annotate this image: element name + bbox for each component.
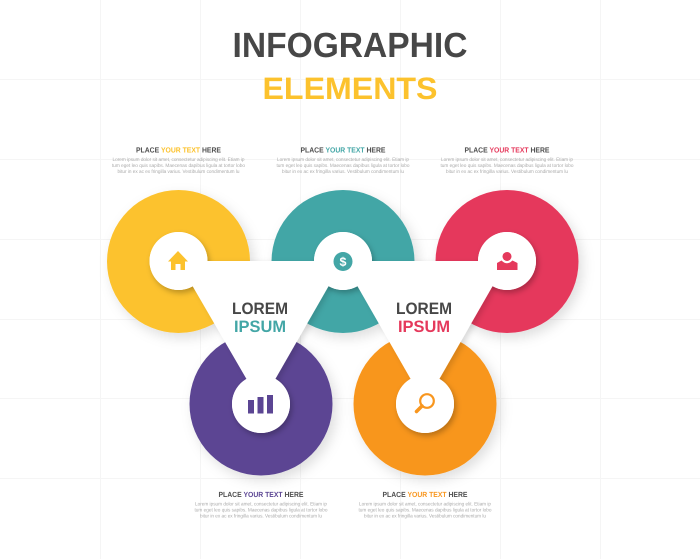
text block: teal: tum eget leo quis sapibs. Maecenas dapibus ligula at tortor lobo [276,163,410,169]
text block: orange: PLACE YOUR TEXT HERE [382,490,468,499]
text block: red: PLACE YOUR TEXT HERE [464,146,550,154]
text block: yellow: PLACE YOUR TEXT HERE [136,146,221,154]
icon: bars [248,395,273,414]
title: ELEMENTS [262,71,438,106]
icon: magnifier [416,394,434,412]
text block: purple: tum eget leo quis sapibs. Maecenas dapibus ligula at tortor lobo [194,508,328,514]
text block: yellow [112,146,245,175]
text block: orange: bitur in ex ac ex fringilla varius. Vestibulum condimentum lu [364,514,486,520]
text block: teal [276,146,410,175]
label: lorem ipsum red [396,300,452,336]
text block: red: Lorem ipsum dolor sit amet, consectetur adipiscing elit. Etiam ip [441,157,573,163]
label: lorem ipsum teal: LOREM [232,300,288,318]
white triangles [178,261,507,404]
label: lorem ipsum red: LOREM [396,300,452,318]
text block: orange: tum eget leo quis sapibs. Maecenas dapibus ligula at tortor lobo [358,508,492,514]
text block: yellow: bitur in ex ac ex fringilla varius. Vestibulum condimentum lu [118,169,240,175]
disc: red [436,190,578,333]
text block: purple [194,490,328,520]
inner circle caps [150,232,536,433]
label: lorem ipsum teal: IPSUM [234,318,286,336]
label: lorem ipsum red: IPSUM [398,318,450,336]
text block: yellow: tum eget leo quis sapibs. Maecenas dapibus ligula at tortor lobo [112,163,245,169]
text block: red [440,146,574,175]
label: lorem ipsum teal [232,300,288,336]
text block: orange: Lorem ipsum dolor sit amet, consectetur adipiscing elit. Etiam ip [359,502,491,508]
disc: yellow [107,190,250,333]
icon: dollar [334,252,352,271]
disc: purple [190,332,332,476]
text block: purple: Lorem ipsum dolor sit amet, consectetur adipiscing elit. Etiam ip [195,502,327,508]
text block: purple: PLACE YOUR TEXT HERE [218,490,304,499]
text block: purple: bitur in ex ac ex fringilla varius. Vestibulum condimentum lu [200,514,322,520]
text block: teal: Lorem ipsum dolor sit amet, consectetur adipiscing elit. Etiam ip [277,157,409,163]
text block: teal: PLACE YOUR TEXT HERE [300,146,386,154]
title: INFOGRAPHIC [232,26,468,65]
text block: orange [358,490,492,520]
text block: yellow: Lorem ipsum dolor sit amet, consectetur adipiscing elit. Etiam ip [112,157,245,163]
disc: teal [272,190,414,333]
icon: house [168,251,188,270]
icon: person [497,252,518,270]
text block: teal: bitur in ex ac ex fringilla varius. Vestibulum condimentum lu [282,169,404,175]
title [232,26,468,106]
disc: orange [354,332,496,476]
text block: red: tum eget leo quis sapibs. Maecenas dapibus ligula at tortor lobo [440,163,574,169]
icon: dollar: $ [340,255,347,269]
text block: red: bitur in ex ac ex fringilla varius. Vestibulum condimentum lu [446,169,568,175]
